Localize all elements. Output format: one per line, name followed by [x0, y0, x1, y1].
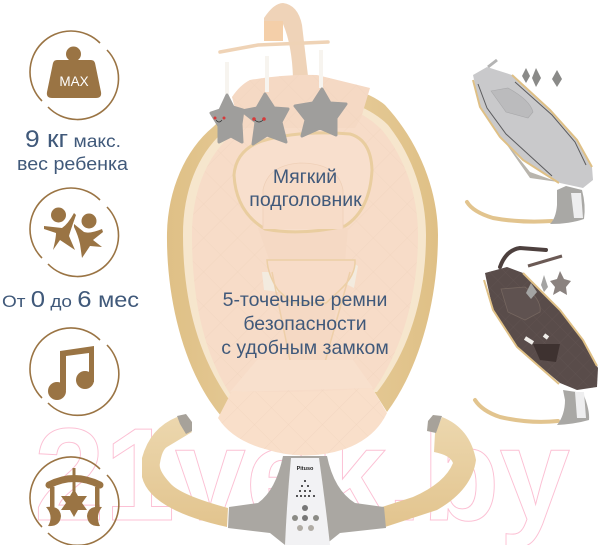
top cushion — [232, 75, 370, 128]
headrest inner pad — [263, 163, 343, 229]
label: five-point harness — [221, 289, 389, 359]
watermark: 21vek.by: 21vek.by — [34, 401, 570, 545]
cream inner rim — [183, 95, 426, 398]
stars — [211, 89, 346, 144]
label: five-point harness: безопасности — [243, 313, 367, 335]
base arc right — [382, 417, 476, 527]
wood frame — [167, 85, 438, 417]
icon: music note — [30, 328, 119, 415]
seat fabric — [192, 100, 418, 394]
icon: baby mobile — [30, 457, 119, 545]
stand — [550, 186, 585, 224]
seat flap — [218, 388, 387, 456]
toys — [526, 275, 548, 299]
seat — [473, 67, 593, 188]
control dots — [296, 480, 315, 497]
toys — [522, 68, 562, 87]
control panel — [285, 458, 330, 545]
rear strut — [500, 135, 558, 182]
icon: max weight — [30, 31, 119, 120]
seat — [485, 267, 598, 390]
harness — [533, 344, 560, 362]
stand — [557, 390, 589, 425]
arm and bar — [500, 248, 546, 267]
dark piping — [478, 82, 586, 176]
label: five-point harness: с удобным замком — [221, 337, 389, 359]
base stand — [228, 456, 386, 545]
harness white loops — [262, 262, 358, 292]
hanger straps — [227, 50, 321, 94]
product: dark swing variant — [475, 248, 598, 425]
control buttons — [292, 505, 319, 531]
label: soft headrest: подголовник — [249, 189, 362, 211]
lower seat pad — [230, 360, 373, 392]
product: main swing — [142, 3, 476, 545]
label: soft headrest — [249, 166, 362, 211]
wood edges — [484, 273, 597, 384]
wood edges — [473, 75, 592, 183]
arch handle — [264, 3, 308, 78]
hanger bar — [220, 42, 328, 52]
text: max child weight: вес ребенка — [17, 153, 129, 174]
text: max child weight — [17, 126, 129, 174]
harness straps — [272, 272, 350, 365]
rocker arc — [475, 400, 558, 422]
headrest — [491, 88, 533, 118]
product: grey swing variant — [467, 60, 593, 224]
text: max child weight: 9 кг макс. — [25, 126, 121, 153]
label: soft headrest: Мягкий — [273, 166, 337, 188]
chest pad — [267, 260, 355, 303]
base arc left — [142, 417, 228, 527]
arm — [488, 60, 497, 67]
text: age range: От 0 до 6 мес — [2, 286, 139, 312]
icon: max weight: MAX — [59, 74, 89, 89]
label: five-point harness: 5-точечные ремни — [223, 289, 387, 311]
headrest — [501, 287, 540, 320]
product: main swing: Pituso — [297, 466, 314, 472]
icon: children — [30, 188, 119, 277]
rocker arc — [467, 202, 552, 222]
harness back panel — [258, 228, 348, 365]
star faces — [214, 116, 266, 122]
headrest — [234, 133, 372, 232]
